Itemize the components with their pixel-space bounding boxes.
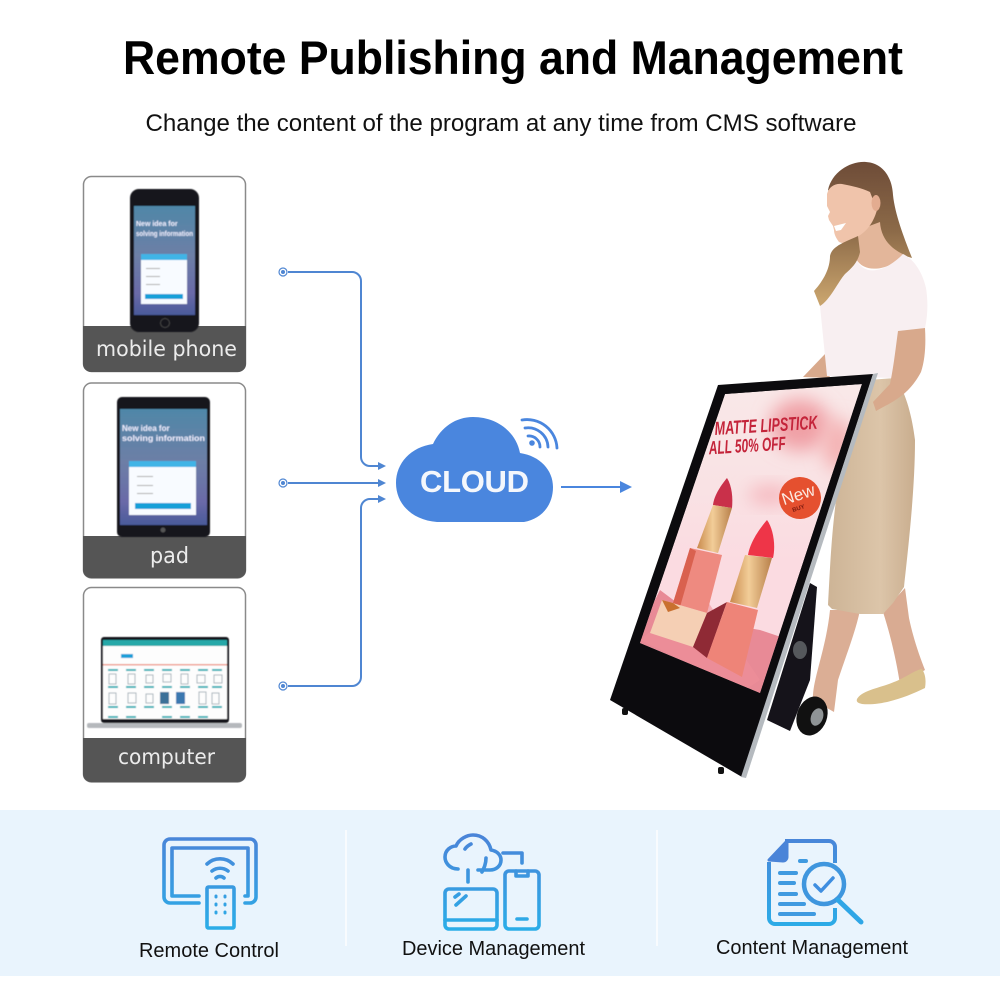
foot right — [718, 767, 724, 774]
near arm — [873, 328, 925, 411]
arrow: pad to cloud — [279, 479, 386, 487]
face — [827, 184, 877, 243]
icon: phone device: solving information — [136, 231, 193, 238]
icon: phone device: New idea for — [136, 221, 178, 228]
icon: tablet device: solving information — [122, 434, 205, 443]
panel: mobile phone — [83, 176, 246, 372]
new badge: New — [779, 480, 818, 509]
icon: laptop device — [87, 637, 242, 728]
back hair — [828, 162, 912, 258]
label: computer: computer — [118, 745, 215, 769]
right leg — [883, 588, 925, 684]
icon: phone device — [130, 189, 199, 332]
screen headline — [706, 413, 820, 459]
woman — [803, 162, 927, 712]
lipstick: left — [673, 478, 732, 613]
icon: wifi signal — [522, 420, 557, 448]
trousers — [828, 378, 915, 614]
label: pad: pad — [150, 544, 189, 569]
panel: feature strip — [0, 810, 1000, 976]
cap — [650, 600, 727, 658]
new badge: BUY — [792, 504, 806, 514]
new badge — [779, 477, 821, 519]
label: mobile phone: mobile phone — [96, 337, 237, 361]
label: device management: Device Management — [402, 938, 585, 960]
front hair — [814, 236, 860, 306]
screen headline: ALL 50% OFF — [708, 434, 787, 459]
title: Remote Publishing and Management — [123, 31, 903, 84]
icon: tablet device — [117, 397, 210, 537]
arrow: computer to cloud — [279, 495, 386, 690]
panel: computer — [83, 588, 246, 782]
icon: cloud — [396, 417, 557, 522]
subtitle: Change the content of the program at any time from CMS software — [146, 110, 856, 137]
black body — [610, 374, 873, 777]
icon: remote control — [164, 839, 256, 928]
arrow: phone to cloud — [279, 268, 386, 470]
digital signage display — [610, 373, 878, 778]
far arm — [803, 354, 830, 378]
label: content management: Content Management — [716, 937, 908, 959]
t-shirt — [820, 254, 927, 378]
shoe — [857, 669, 926, 704]
arrow: cloud to display — [561, 481, 632, 493]
screen headline: MATTE LIPSTICK — [714, 413, 819, 440]
panel: pad — [83, 383, 246, 578]
silver edge — [741, 373, 878, 778]
lipstick: right — [707, 520, 774, 677]
latch — [793, 641, 807, 659]
left leg — [813, 610, 860, 712]
icon: device management — [445, 835, 539, 929]
trolley stand — [767, 583, 833, 740]
foot left — [622, 708, 628, 715]
neck — [853, 222, 905, 269]
ear — [872, 195, 880, 211]
screen content — [630, 384, 862, 700]
cloud label: CLOUD — [420, 464, 529, 499]
smile — [834, 223, 846, 231]
wheel — [791, 692, 833, 740]
icon: content management — [769, 841, 861, 924]
icon: tablet device: New idea for — [122, 424, 170, 433]
label: remote control: Remote Control — [139, 940, 279, 962]
floor — [640, 590, 779, 693]
